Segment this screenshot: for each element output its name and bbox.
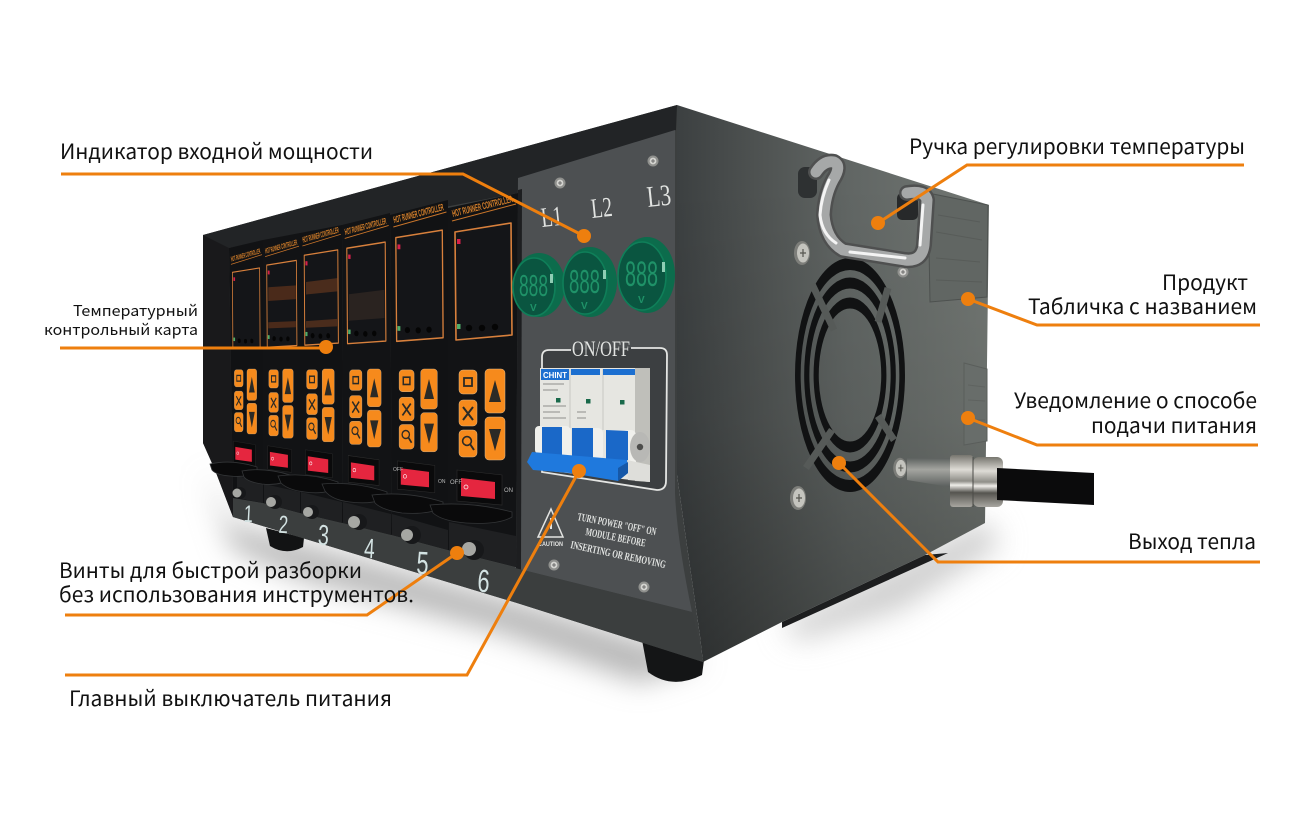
voltage meter L2 — [563, 247, 617, 317]
device: hot runner controller: HOT RUNNER CONTROLLER — [392, 202, 445, 225]
callout: power supply notice — [961, 385, 1258, 445]
circuit breaker: CHINT — [543, 371, 567, 380]
warning text — [569, 511, 667, 571]
panel: module 5: OFF — [393, 467, 403, 473]
callout: power supply notice: Уведомление о способе — [1014, 385, 1257, 415]
front body — [203, 105, 703, 662]
thumbscrews — [232, 487, 484, 560]
panel: module 5: ON — [438, 479, 446, 485]
plate edge strip — [516, 189, 522, 570]
voltage meter L3: V — [638, 295, 645, 306]
foot: left — [266, 528, 304, 551]
callout: input power indicator: Индикатор входной мощности — [60, 136, 373, 166]
callout: product nameplate: Продукт — [1162, 267, 1248, 297]
callout: quick release screws — [59, 546, 464, 615]
nameplate — [928, 193, 988, 302]
module handles — [210, 462, 512, 523]
panel: module 1 — [229, 240, 263, 503]
panel: module 5 — [390, 200, 448, 550]
callout: quick release screws: без использования инструментов. — [59, 579, 414, 609]
phase labels L1 L2 L3: L2 — [590, 193, 614, 225]
callout: product nameplate — [961, 267, 1260, 325]
phase labels L1 L2 L3: L3 — [645, 178, 673, 214]
module numbers: 3 — [317, 520, 330, 552]
module numbers: 4 — [363, 533, 376, 565]
panel: module 6: OFF — [450, 480, 462, 486]
voltage meter L1: 888 — [519, 268, 548, 303]
callout: quick release screws: Винты для быстрой разборки — [59, 555, 362, 585]
circuit breaker — [527, 368, 650, 482]
callout: power supply notice: подачи питания — [1091, 410, 1257, 440]
shadow under device front — [205, 470, 703, 682]
voltage meter L2: 888 — [569, 263, 600, 300]
module numbers: 5 — [416, 544, 430, 581]
power cable — [997, 468, 1094, 505]
shadow under device side — [782, 520, 1000, 640]
right plate — [515, 130, 692, 612]
chrome handle — [798, 162, 927, 260]
panel: module 6: ON — [504, 488, 513, 494]
underside strip — [782, 553, 948, 628]
callout: heat outlet — [832, 456, 1260, 562]
callout: heat outlet: Выход тепла — [1128, 526, 1256, 556]
callout: temperature adjustment handle — [871, 131, 1245, 230]
module numbers: 6 — [477, 562, 491, 599]
ON/OFF frame: ON/OFF — [572, 336, 630, 361]
top recess band — [203, 105, 677, 260]
caution triangle — [538, 509, 563, 548]
warning text: TURN POWER "OFF" ON — [576, 511, 657, 538]
voltage meter L2: V — [581, 301, 588, 312]
warning text: INSERTING OR REMOVING — [569, 539, 667, 571]
callout: input power indicator — [60, 136, 591, 243]
callout: main power switch: Главный выключатель питания — [69, 683, 392, 713]
device: hot runner controller: HOT RUNNER CONTROLLER — [451, 194, 514, 220]
ON/OFF frame — [542, 336, 667, 490]
callout: temperature adjustment handle: Ручка регулировки температуры — [909, 131, 1245, 161]
device: hot runner controller — [203, 105, 1094, 682]
left frame — [203, 235, 233, 517]
voltage meter L1: V — [530, 303, 537, 314]
phase labels L1 L2 L3: L1 — [540, 202, 564, 234]
warning text: MODULE BEFORE — [584, 526, 647, 550]
panel: module 4: HOT RUNNER CONTROLLER — [344, 216, 387, 237]
phase labels L1 L2 L3 — [540, 178, 673, 234]
voltage meter L1 — [513, 253, 565, 317]
device: hot runner controller: HOT RUNNER CONTROLLER — [265, 239, 298, 256]
callout: temperature control card: контрольный карта — [44, 319, 198, 340]
callout: main power switch — [65, 464, 586, 713]
plate screws — [548, 156, 658, 592]
side screws — [790, 241, 908, 510]
voltage meter L3 — [618, 237, 675, 313]
panel: module 3 — [300, 222, 343, 523]
panel: module 3: HOT RUNNER CONTROLLER — [302, 225, 340, 245]
panel: module 4 — [342, 213, 392, 535]
cable gland — [907, 455, 1003, 507]
voltage meter L3: 888 — [625, 255, 658, 294]
panel: module 6 — [448, 193, 518, 567]
module lower sections — [237, 476, 516, 567]
module numbers — [243, 501, 491, 599]
side panel — [677, 105, 989, 662]
module numbers: 2 — [278, 511, 289, 539]
power notice plate — [964, 363, 987, 445]
caution triangle: CAUTION — [538, 542, 563, 548]
lower number band — [233, 498, 703, 662]
panel: module 2 — [263, 233, 300, 513]
foot: front right — [642, 640, 704, 682]
callout: temperature control card: Температурный — [73, 300, 198, 321]
module numbers: 1 — [243, 501, 254, 528]
fan grill — [798, 264, 902, 486]
device: hot runner controller: HOT RUNNER CONTROLLER — [231, 248, 261, 264]
callout: product nameplate: Табличка с названием — [1028, 291, 1257, 321]
callout: temperature control card — [44, 300, 333, 354]
